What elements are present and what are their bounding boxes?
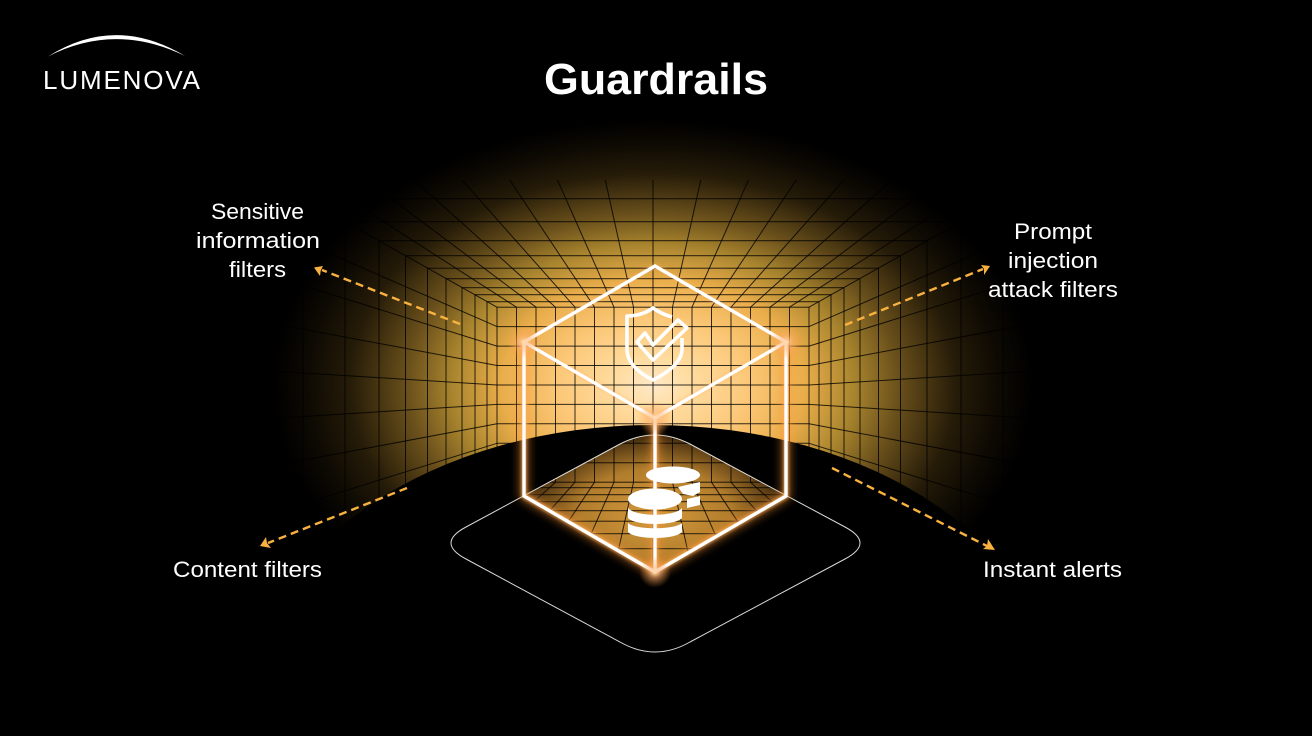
title: Guardrails [544,55,768,104]
perspective grid room [299,180,1007,508]
cube edges [524,266,786,572]
dark dome [253,425,1053,698]
label: prompt injection attack filters: attack filters [988,277,1118,302]
label: prompt injection attack filters [988,219,1118,302]
glowing cube [507,266,803,588]
platform diamond [451,435,860,652]
label: instant alerts: Instant alerts [983,557,1122,582]
arrow: content filters [260,488,407,548]
arrow: instant alerts [832,468,995,550]
label: content filters: Content filters [173,557,322,582]
label: sensitive information filters [196,199,320,282]
label: prompt injection attack filters: injection [1008,248,1098,273]
icon: database stacks [628,466,700,538]
label: sensitive information filters: Sensitive [211,199,304,224]
arrow: sensitive information filters [314,266,460,324]
icon: shield with check [627,308,687,380]
label: sensitive information filters: information [196,228,320,253]
label: prompt injection attack filters: Prompt [1014,219,1092,244]
cube glow [524,342,786,572]
floor visible inside cube [526,436,784,568]
arrow: prompt injection attack filters [845,265,990,325]
logo wordmark: LUMENOVA [43,65,201,95]
front database [628,488,682,538]
label: sensitive information filters: filters [229,257,286,282]
cube corner sparks [507,325,541,359]
back database [646,466,700,508]
logo: Lumenova [43,35,201,95]
glow background [273,120,1033,650]
logo arc [48,35,185,56]
